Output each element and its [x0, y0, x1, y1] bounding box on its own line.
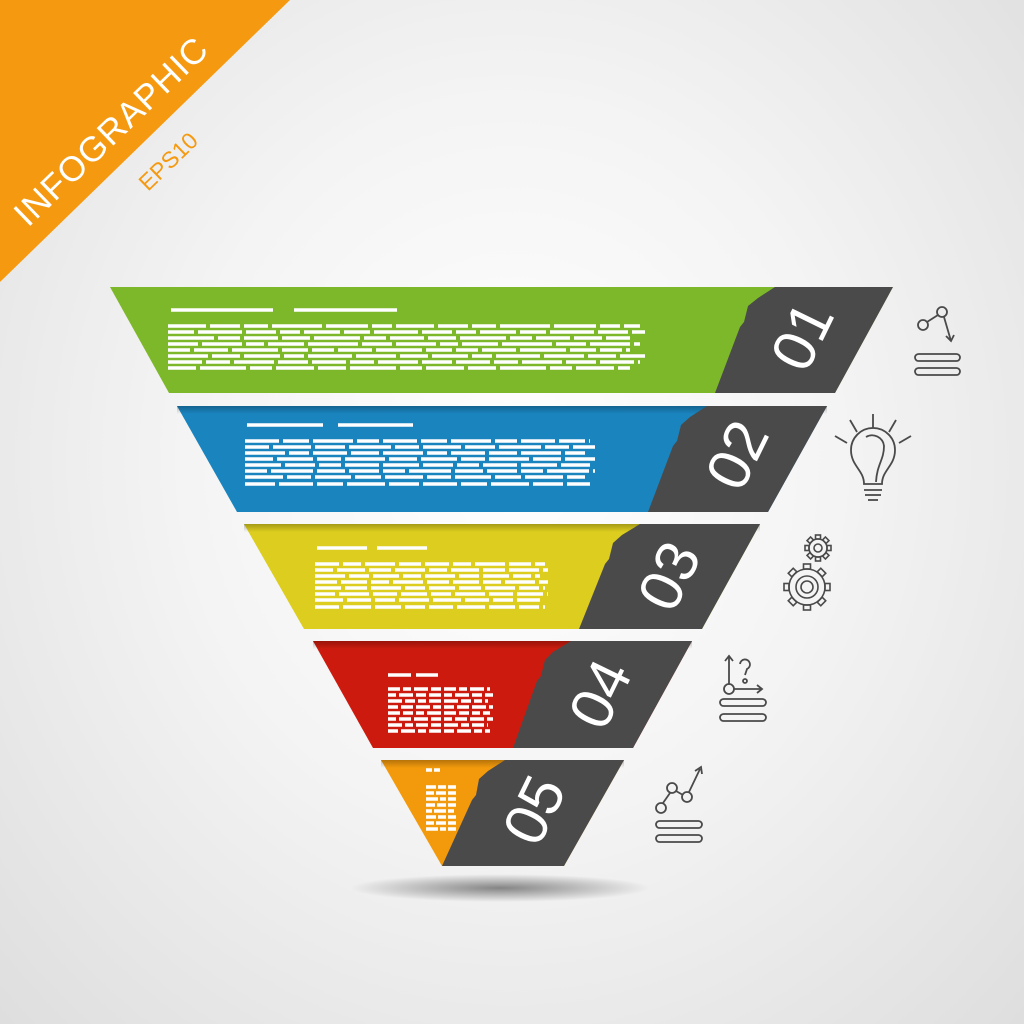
icon: nodes with arrow: [915, 307, 960, 375]
band 1: [110, 287, 893, 393]
number 03: 03: [624, 531, 714, 621]
icon: question arrows: [720, 656, 766, 721]
text placeholder 2: [245, 425, 595, 484]
number 02: 02: [692, 410, 782, 500]
band 5: [381, 760, 624, 866]
number 04: 04: [555, 649, 645, 739]
banner: orange corner: [0, 0, 290, 282]
icon: light bulb: [835, 414, 911, 500]
icon: growth chart: [656, 767, 702, 842]
banner title: INFOGRAPHIC: [6, 29, 216, 234]
band 4: [313, 641, 692, 748]
funnel floor shadow: [350, 874, 650, 902]
text placeholder 1: [168, 310, 645, 368]
icon: gears: [774, 530, 840, 620]
subtitle EPS10: EPS10: [133, 127, 203, 196]
band 3: [244, 524, 760, 629]
text placeholder 4: [388, 675, 493, 731]
number 05: 05: [489, 765, 579, 855]
number 01: 01: [757, 291, 847, 381]
text placeholder 3: [315, 548, 548, 607]
text placeholder 5: [426, 770, 456, 829]
band 2: [177, 406, 827, 512]
